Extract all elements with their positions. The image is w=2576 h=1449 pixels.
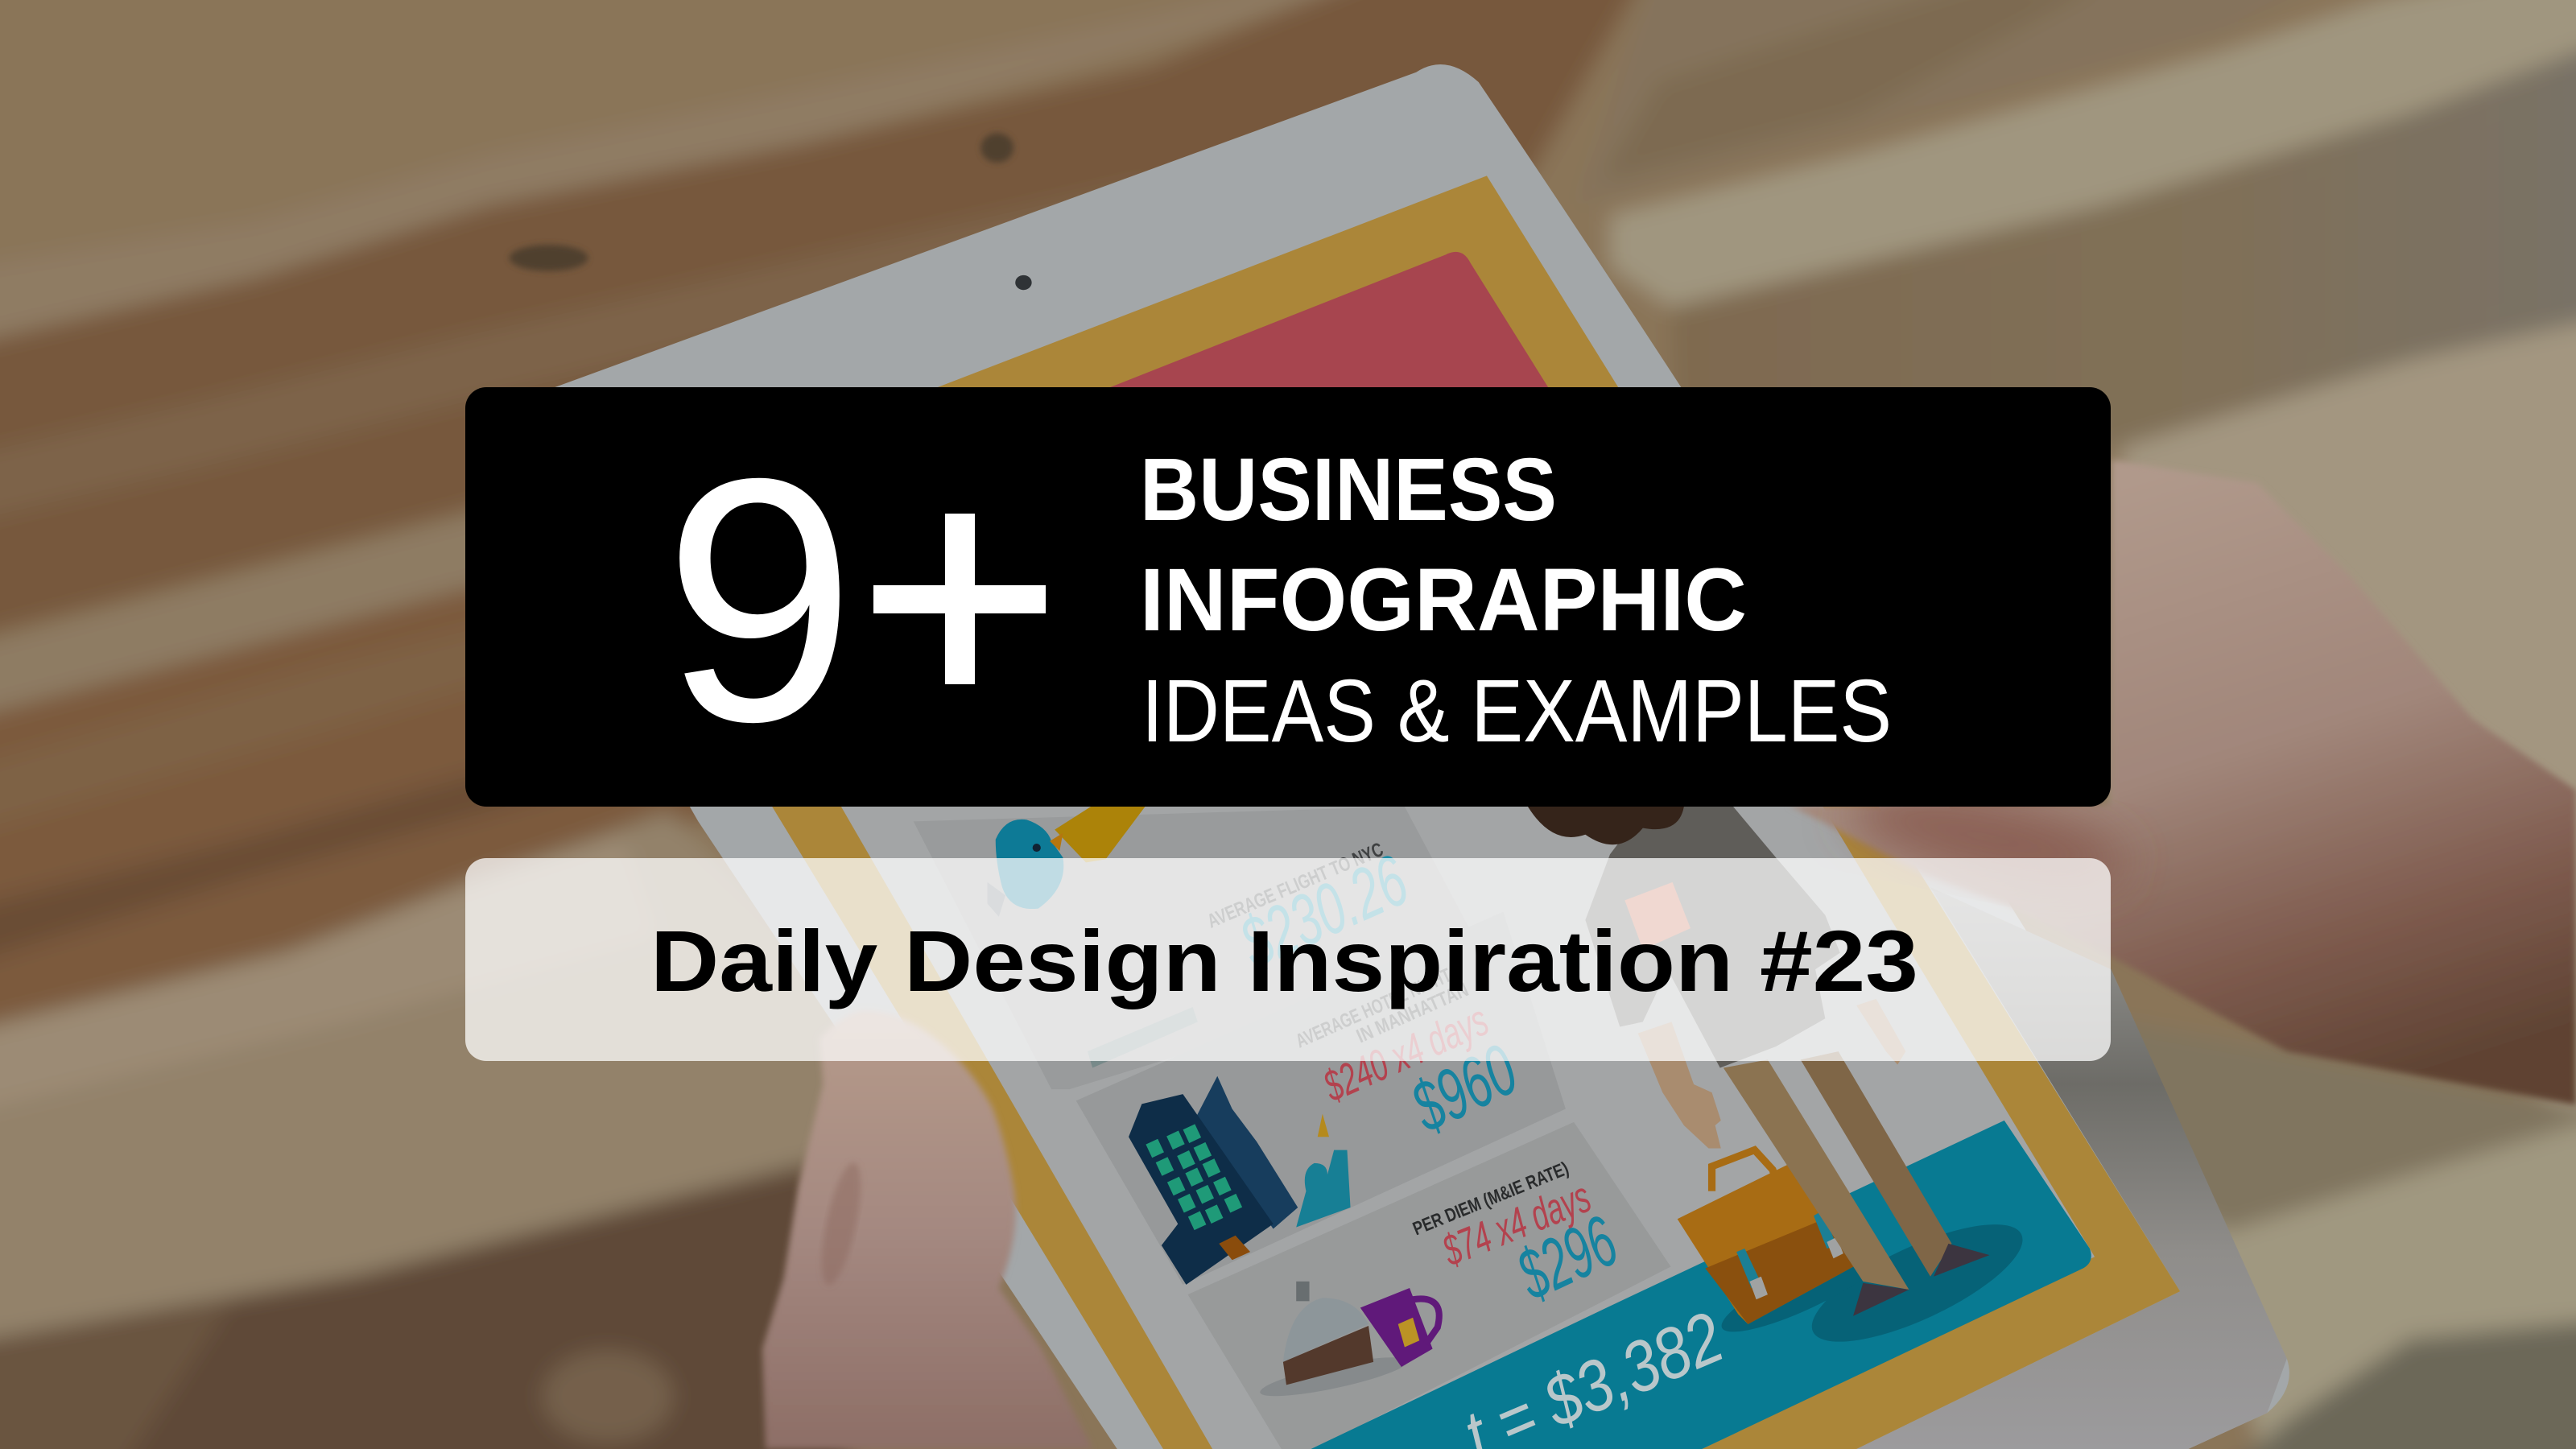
shoes	[1853, 1283, 1909, 1316]
label: average flight to NYC: AVERAGE FLIGHT TO NYC	[1204, 839, 1386, 933]
light page area	[841, 394, 2095, 1449]
subtitle text: Daily Design Inspiration #23	[650, 912, 1918, 1009]
right hand red shading	[1843, 770, 2132, 906]
finger crease	[814, 1160, 869, 1288]
hair	[1528, 807, 1684, 844]
tablet body	[469, 64, 2289, 1449]
value: per diem: $296	[1505, 1201, 1629, 1316]
value: flight cost: $230.26	[1228, 840, 1419, 985]
heading: business: BUSINESS	[1140, 440, 1557, 539]
tablet lower bezel shading	[1856, 887, 2287, 1449]
big number 9: 9	[663, 407, 856, 794]
plus sign vertical	[945, 514, 975, 684]
right hand	[1856, 999, 1905, 1064]
label: per diem: PER DIEM (M&IE RATE)	[1410, 1158, 1571, 1239]
label: average hotel night: AVERAGE HOTEL NIGHT	[1293, 964, 1455, 1053]
briefcase	[1678, 1150, 1856, 1324]
bird and ticket icon	[988, 807, 1198, 1068]
teal total band	[1311, 1121, 2091, 1449]
grey panel: per diem	[1188, 1122, 1671, 1449]
left arm and hand	[1638, 1022, 1721, 1149]
plus sign	[873, 585, 1046, 613]
left hand	[762, 1010, 1092, 1449]
panel: subtitle	[465, 858, 2111, 1061]
infographic labels on tablet	[1204, 839, 1629, 1316]
panel: title	[465, 387, 2111, 807]
legs	[1801, 1051, 1951, 1277]
name badge	[1624, 882, 1690, 950]
calculation: hotel: $240 x4 days	[1315, 995, 1496, 1112]
service bell and mug icon	[1257, 1282, 1439, 1404]
red header	[1092, 252, 1553, 394]
person illustration	[1528, 807, 1989, 1316]
heading: ideas and examples: IDEAS & EXAMPLES	[1141, 662, 1892, 761]
right hand holding tablet	[1789, 460, 2576, 1104]
heading: infographic: INFOGRAPHIC	[1140, 551, 1747, 650]
wood knots	[510, 133, 1013, 271]
grey panel: hotel	[1076, 912, 1566, 1285]
label: in Manhattan: IN MANHATTAN	[1353, 979, 1472, 1047]
grey panel: flight	[914, 807, 1487, 1089]
value: hotel: $960	[1399, 1030, 1530, 1148]
statue of liberty and buildings icon	[1129, 1076, 1351, 1285]
yellow infographic page	[723, 175, 2180, 1449]
shadow under person	[1798, 1202, 2037, 1364]
shadow under briefcase	[1714, 1233, 1894, 1346]
shirt	[1585, 807, 1840, 1068]
camera dot	[1015, 275, 1032, 290]
calculation: per diem: $74 x4 days	[1435, 1171, 1597, 1276]
